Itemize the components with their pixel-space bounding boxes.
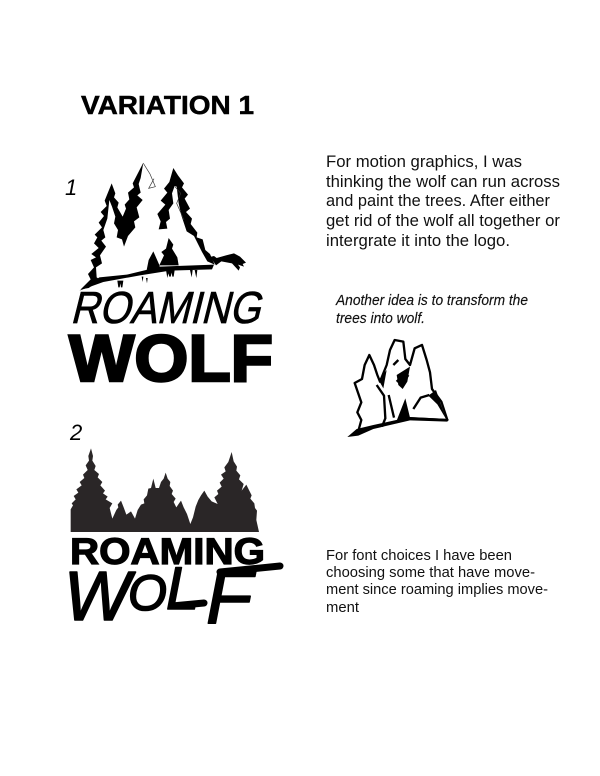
logo 1: tree outline mark with wolf: [79, 163, 246, 291]
icon: thin tree sketch: [143, 163, 184, 220]
icon: right tree: [157, 168, 215, 265]
text block: motion graphics idea: and paint the trees. After either: [326, 191, 550, 210]
logo 2 wordmark: WOLF: O: [128, 565, 167, 621]
number label 2: 2: [69, 420, 82, 445]
icon: small trees: [147, 238, 179, 270]
icon: dark wedges: [379, 367, 446, 422]
text block: transform idea: Another idea is to transform the: [335, 293, 528, 309]
logo 2 wordmark: WOLF: F: [206, 555, 256, 640]
logo 1 wordmark: ROAMING: ROAMING: [68, 283, 270, 333]
logo 2: forest silhouette: [71, 448, 259, 532]
icon: tree inner strokes: [377, 360, 429, 427]
text block: motion graphics idea: thinking the wolf can run across: [326, 172, 560, 191]
logo 2 wordmark: WOLF: [64, 555, 280, 640]
icon: tree outlines: [355, 340, 447, 431]
text block: motion graphics idea: get rid of the wolf all together or: [326, 211, 560, 230]
number label 1: 1: [65, 175, 77, 200]
text block: transform idea: trees into wolf.: [336, 311, 425, 327]
text block: font choices: ment: [326, 599, 360, 616]
title: VARIATION 1: [81, 92, 254, 120]
logo 2 wordmark: WOLF: L: [166, 555, 199, 622]
icon: ground stroke: [347, 417, 449, 437]
logo 2 wordmark: ROAMING: ROAMING: [70, 530, 265, 572]
icon: paint drips: [117, 270, 197, 287]
logo 2 wordmark: WOLF: W: [64, 557, 136, 635]
logo 1 wordmark: WOLF: WOLF: [69, 321, 273, 395]
text block: motion graphics idea: [326, 152, 560, 250]
text block: font choices: For font choices I have been: [326, 547, 512, 564]
text block: font choices: [326, 547, 548, 616]
text block: motion graphics idea: For motion graphics, I was: [326, 152, 522, 171]
text block: transform idea: [335, 293, 528, 327]
text block: font choices: ment since roaming implies move-: [326, 581, 548, 598]
icon: trees transforming into wolf: [347, 340, 449, 437]
icon: ground stroke: [79, 265, 214, 291]
text block: motion graphics idea: intergrate it into the logo.: [326, 231, 510, 250]
icon: left twin trees: [81, 163, 143, 289]
icon: running wolf: [208, 253, 246, 271]
text block: font choices: choosing some that have move-: [326, 564, 535, 581]
